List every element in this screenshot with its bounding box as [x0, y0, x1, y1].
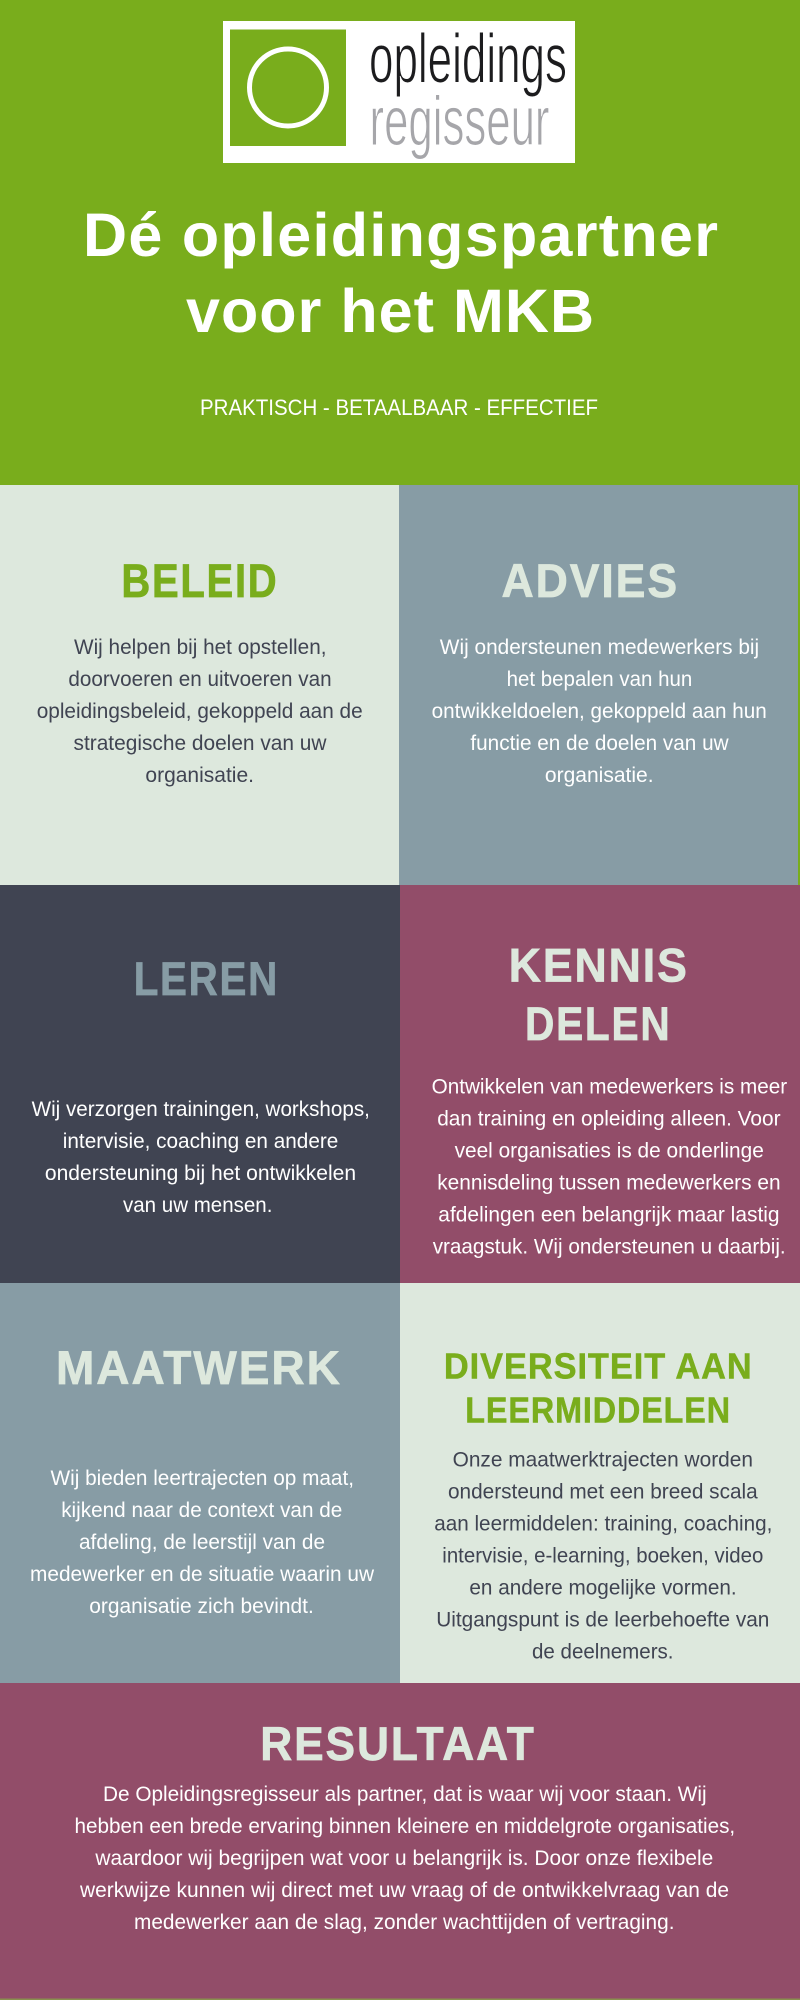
text: maatwerk: afdeling, de leerstijl van de [79, 1530, 325, 1554]
text: diversiteit aan leermiddelen: ondersteund met een breed scala [448, 1480, 758, 1504]
logo: opleidings [369, 20, 567, 98]
title [83, 201, 718, 345]
text: beleid: strategische doelen van uw [74, 731, 327, 755]
heading: kennis delen [509, 939, 689, 1050]
text: resultaat: medewerker aan de slag, zonder wachttijden of vertraging. [134, 1910, 674, 1934]
text: beleid: opleidingsbeleid, gekoppeld aan de [37, 699, 363, 723]
text: beleid: organisatie. [145, 763, 254, 787]
text: advies: het bepalen van hun [507, 667, 692, 691]
text: advies [432, 635, 767, 787]
text: leren: intervisie, coaching en andere [63, 1129, 338, 1153]
panel: leren [0, 885, 400, 1283]
text: beleid: doorvoeren en uitvoeren van [68, 667, 332, 691]
text: resultaat: waardoor wij begrijpen wat voor u belangrijk is. Door onze flexibele [94, 1846, 713, 1870]
text: leren: Wij verzorgen trainingen, workshops, [32, 1097, 370, 1121]
text: kennis delen: vraagstuk. Wij ondersteunen u daarbij. [433, 1234, 786, 1258]
title: Dé opleidingspartner [83, 201, 718, 269]
text: advies: Wij ondersteunen medewerkers bij [440, 635, 759, 659]
heading: kennis delen: KENNIS [509, 939, 689, 992]
text: diversiteit aan leermiddelen [434, 1448, 772, 1664]
text: maatwerk: Wij bieden leertrajecten op maat, [50, 1466, 354, 1490]
text: kennis delen: afdelingen een belangrijk maar lastig [438, 1202, 780, 1226]
panel: kennis delen [400, 885, 800, 1283]
panel: advies [399, 485, 798, 885]
text: leren [32, 1097, 370, 1217]
heading: kennis delen: DELEN [525, 997, 671, 1050]
text: kennis delen: veel organisaties is de onderlinge [455, 1138, 764, 1162]
text: maatwerk [30, 1466, 374, 1618]
text: maatwerk: medewerker en de situatie waarin uw [30, 1562, 374, 1586]
panel: resultaat [0, 1683, 800, 1998]
logo [223, 20, 575, 163]
text: kennis delen [432, 1074, 787, 1258]
text: resultaat: De Opleidingsregisseur als partner, dat is waar wij voor staan. Wij [103, 1782, 707, 1806]
text: beleid [37, 635, 363, 787]
text: leren: ondersteuning bij het ontwikkelen [45, 1161, 356, 1185]
panel: beleid [0, 485, 399, 885]
text: maatwerk: kijkend naar de context van de [61, 1498, 342, 1522]
heading: diversiteit aan leermiddelen: DIVERSITEIT AAN [444, 1345, 753, 1386]
text: kennis delen: Ontwikkelen van medewerkers is meer [432, 1074, 787, 1098]
text: diversiteit aan leermiddelen: aan leermiddelen: training, coaching, [434, 1512, 772, 1536]
text: advies: functie en de doelen van uw [470, 731, 729, 755]
text: leren: van uw mensen. [123, 1193, 272, 1217]
text: diversiteit aan leermiddelen: Onze maatwerktrajecten worden [453, 1448, 753, 1472]
title: voor het MKB [186, 277, 594, 345]
text: beleid: Wij helpen bij het opstellen, [74, 635, 326, 659]
text: maatwerk: organisatie zich bevindt. [89, 1594, 314, 1618]
text: diversiteit aan leermiddelen: en andere mogelijke vormen. [469, 1576, 737, 1600]
text: diversiteit aan leermiddelen: Uitgangspunt is de leerbehoefte van [436, 1608, 769, 1632]
heading: advies: ADVIES [502, 554, 679, 607]
text: advies: ontwikkeldoelen, gekoppeld aan hun [432, 699, 767, 723]
text: resultaat [74, 1782, 735, 1934]
heading: diversiteit aan leermiddelen [444, 1345, 753, 1431]
text: diversiteit aan leermiddelen: de deelnemers. [532, 1640, 674, 1664]
text: kennis delen: kennisdeling tussen medewerkers en [437, 1170, 781, 1194]
text: advies: organisatie. [545, 763, 654, 787]
heading: diversiteit aan leermiddelen: LEERMIDDELEN [465, 1390, 731, 1431]
text: resultaat: werkwijze kunnen wij direct met uw vraag of de ontwikkelvraag van de [79, 1878, 729, 1902]
panel: maatwerk [0, 1283, 400, 1683]
text: diversiteit aan leermiddelen: intervisie, e-learning, boeken, video [442, 1544, 763, 1568]
heading: resultaat: RESULTAAT [260, 1717, 536, 1770]
text: kennis delen: dan training en opleiding alleen. Voor [437, 1106, 781, 1130]
heading: leren: LEREN [134, 952, 279, 1005]
subtitle: PRAKTISCH - BETAALBAAR - EFFECTIEF [200, 395, 598, 420]
logo: regisseur [370, 82, 550, 160]
heading: maatwerk: MAATWERK [56, 1341, 342, 1394]
heading: beleid: BELEID [121, 554, 278, 607]
panel: diversiteit aan leermiddelen [400, 1283, 800, 1683]
text: resultaat: hebben een brede ervaring binnen kleinere en middelgrote organisaties, [74, 1814, 735, 1838]
panel: header [0, 0, 800, 485]
